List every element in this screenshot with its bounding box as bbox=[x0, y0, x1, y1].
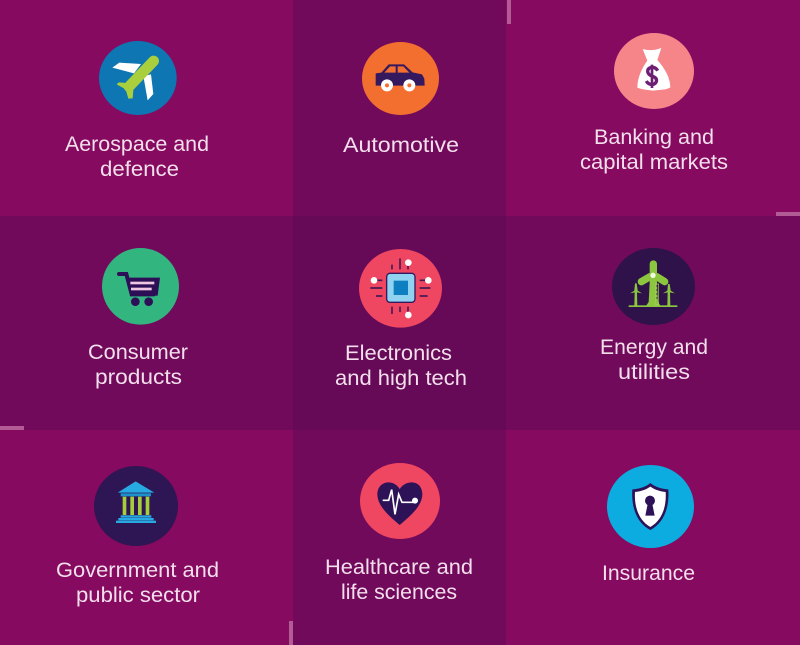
icon: shield with keyhole bbox=[607, 465, 694, 548]
label: consumer products bbox=[88, 341, 188, 389]
label: banking and capital markets: capital markets bbox=[580, 151, 728, 174]
icon: airplane bbox=[99, 41, 177, 115]
panel: consumer products bbox=[88, 248, 188, 389]
icon: wind turbines bbox=[612, 248, 695, 325]
label: energy and utilities: Energy and bbox=[600, 336, 708, 359]
icon: shopping cart bbox=[102, 248, 179, 325]
label: government and public sector: Government and bbox=[56, 559, 219, 582]
panel: automotive bbox=[343, 42, 459, 157]
panel: healthcare and life sciences bbox=[325, 463, 473, 604]
label: healthcare and life sciences bbox=[325, 556, 473, 604]
label: banking and capital markets: Banking and bbox=[594, 126, 714, 149]
label: healthcare and life sciences: life sciences bbox=[341, 581, 457, 604]
panel: electronics and high tech bbox=[335, 249, 467, 390]
label: electronics and high tech: and high tech bbox=[335, 367, 467, 390]
label: insurance: Insurance bbox=[602, 562, 695, 585]
label: aerospace and defence bbox=[65, 133, 209, 181]
label: government and public sector: public sector bbox=[76, 584, 200, 607]
label: consumer products: products bbox=[95, 366, 182, 389]
label: electronics and high tech: Electronics bbox=[345, 342, 452, 365]
label: government and public sector bbox=[56, 559, 219, 607]
icon: government building bbox=[94, 466, 178, 546]
label: aerospace and defence: defence bbox=[100, 158, 179, 181]
label: banking and capital markets bbox=[580, 126, 728, 174]
panel: energy and utilities bbox=[600, 248, 708, 384]
label: aerospace and defence: Aerospace and bbox=[65, 133, 209, 156]
label: healthcare and life sciences: Healthcare and bbox=[325, 556, 473, 579]
icon: car bbox=[362, 42, 439, 115]
icon: money bag bbox=[614, 33, 694, 109]
icon: heart with pulse bbox=[360, 463, 440, 539]
panel: insurance bbox=[602, 465, 695, 585]
panel: aerospace and defence bbox=[65, 41, 209, 181]
panel: banking and capital markets bbox=[580, 33, 728, 174]
label: energy and utilities bbox=[600, 336, 708, 384]
icon: microchip bbox=[359, 249, 442, 328]
label: electronics and high tech bbox=[335, 342, 467, 390]
panel: government and public sector bbox=[56, 466, 219, 607]
label: consumer products: Consumer bbox=[88, 341, 188, 364]
label: energy and utilities: utilities bbox=[618, 361, 690, 384]
label: automotive: Automotive bbox=[343, 134, 459, 157]
